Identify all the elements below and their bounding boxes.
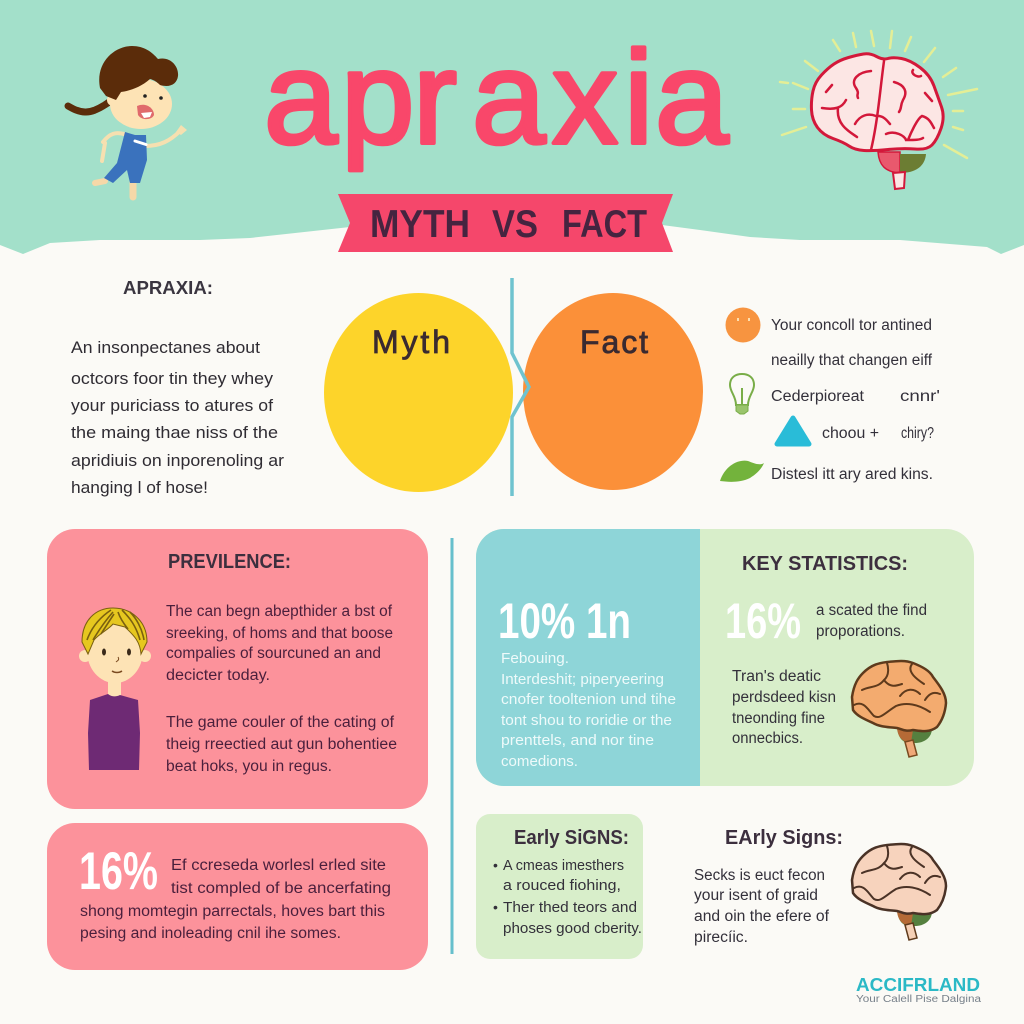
body text: The game couler of the cating of [166,714,395,731]
illustration: brain with rays [780,31,977,189]
logo: Your Calell Pise Dalgina [856,994,982,1005]
myth circle [324,293,513,492]
fact list: choou + [822,425,879,442]
early signs right [694,827,843,946]
stat description [501,651,676,770]
center divider [450,538,454,954]
banner: myth vs fact: VS [492,203,538,246]
early signs right: your isent of graid [694,887,818,904]
panel: 16 percent callout: Ef ccreseda worlesl erled site [171,857,386,874]
logo: ACCIFRLAND [856,975,980,995]
header background [0,0,1024,254]
panel: early signs: phoses good cberity. [503,921,642,937]
body text: theig rreectied aut gun bohentiee [166,736,397,753]
panel: key statistics: onnecbics. [732,730,803,747]
heading: KEY STATISTICS: [742,553,908,575]
body text: beat hoks, you in regus. [166,758,332,775]
myth circle: Myth [372,324,450,360]
body text: compalies of sourcuned an and [166,645,381,662]
panel: 16 percent callout [47,823,428,970]
fact list: cnnr' [900,388,940,405]
icon: blue triangle [777,418,809,444]
stat description: comedions. [501,754,578,770]
icon: pink brain [852,844,946,940]
panel: early signs: Early SiGNS: [514,827,629,849]
stat description: cnofer tooltenion und tihe [501,692,676,708]
fact list: Cederpioreat [771,388,865,405]
stat description: Febouing. [501,651,569,667]
banner: myth vs fact: FACT [562,203,647,246]
intro text: hanging l of hose! [71,478,208,497]
body text: decicter today. [166,667,270,684]
stat description: prenttels, and nor tine [501,733,654,749]
fact list [720,308,940,483]
intro text: the maing thae niss of the [71,423,278,442]
fact circle: Fact [580,324,648,360]
fact list: chiry? [901,425,934,442]
panel: key statistics: perdsdeed kisn [732,689,836,706]
panel: early signs: Ther thed teors and [503,900,637,916]
early signs right: and oin the efere of [694,908,830,925]
panel: key statistics [476,529,974,786]
intro text: apridiuis on inporenoling ar [71,451,284,470]
panel: early signs [476,814,643,959]
panel: prevalence [47,529,428,809]
intro text: octcors foor tin they whey [71,369,274,388]
panel: early signs: A cmeas imesthers [503,858,624,874]
intro heading: APRAXIA: [123,278,213,298]
panel: key statistics: Tran's deatic [732,668,821,685]
heading: PREVILENCE: [168,551,291,573]
body text: sreeking, of homs and that boose [166,625,393,642]
panel: 16 percent callout: pesing and inoleading cnil ihe somes. [80,925,341,942]
icon: orange brain [852,661,946,757]
stat: 10 percent: 10% 1n [498,593,631,649]
intro text: your puriciass to atures of [71,396,273,415]
early signs right: Secks is euct fecon [694,867,825,884]
early signs right: pirecíic. [694,929,748,946]
icon: light bulb [730,374,754,414]
panel: key statistics: tneonding fine [732,710,825,727]
panel: early signs: • [493,857,498,873]
panel: 16 percent callout: tist compled of be ancerfating [171,880,391,897]
stat: 16 percent: 16% [725,593,801,649]
banner: myth vs fact [338,194,673,252]
panel: 16 percent callout: shong momtegin parrectals, hoves bart this [80,903,385,920]
light rays [780,31,977,158]
panel: key statistics: a scated the find [816,602,927,619]
body text [166,603,397,775]
fact list: neailly that changen eiff [771,352,933,369]
panel: early signs: a rouced fiohing, [503,878,621,894]
stat description: tont shou to roridie or the [501,713,672,729]
icon: orange face [726,308,760,342]
illustration: running girl [68,46,187,197]
early signs right: EArly Signs: [725,827,843,849]
logo [856,975,982,1005]
panel: key statistics: proporations. [816,623,905,640]
fact list: Your concoll tor antined [771,317,932,334]
title: apraxia [264,24,729,171]
banner: myth vs fact: MYTH [370,203,470,246]
icon: boy [79,608,151,770]
fact circle [523,293,703,490]
intro text [71,338,284,497]
divider line [512,278,529,496]
panel: 16 percent callout: 16% [79,842,158,901]
icon: green leaf [720,461,764,482]
panel: early signs: • [493,899,498,915]
body text: The can begn abepthider a bst of [166,603,393,620]
fact list: Distesl itt ary ared kins. [771,466,933,483]
stat description: Interdeshit; piperyeering [501,672,664,688]
intro text: An insonpectanes about [71,338,260,357]
